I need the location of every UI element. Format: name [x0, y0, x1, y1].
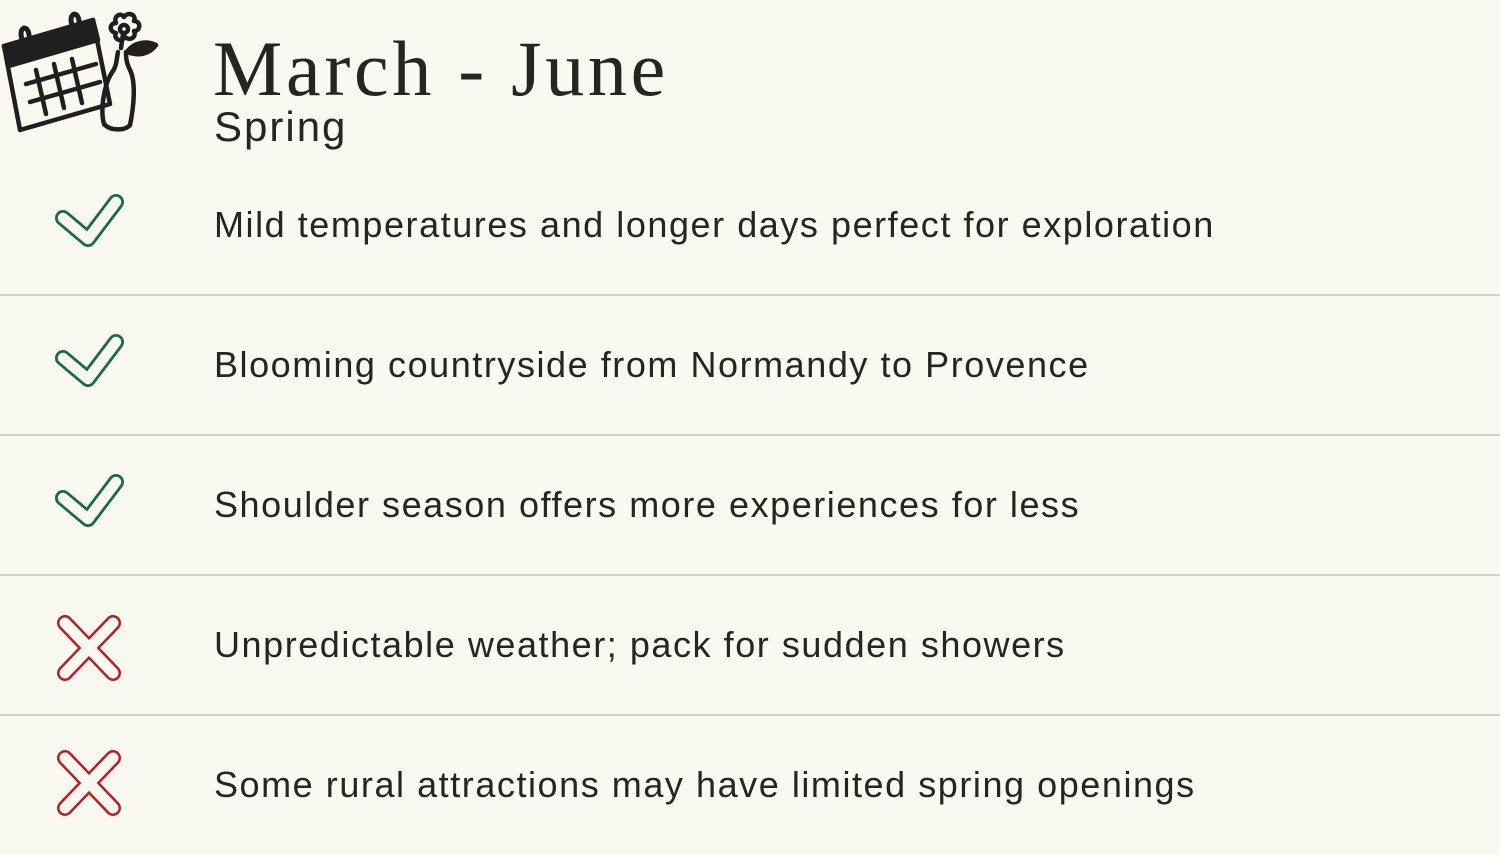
row: pro 1: Mild temperatures and longer days perfect for exploration: [214, 204, 1215, 245]
row: con 1: [57, 615, 1066, 681]
row: pro 3: [55, 474, 1080, 527]
icon: check: [55, 194, 124, 247]
title: March - June: [213, 25, 669, 112]
row: con 2: [57, 750, 1196, 816]
icon: check: [55, 334, 124, 387]
row: con 2: Some rural attractions may have limited spring openings: [214, 764, 1196, 805]
icon: check: [55, 474, 124, 527]
icon: cross: [57, 750, 121, 816]
icon: calendar with flower vase: [2, 12, 158, 132]
row: pro 3: Shoulder season offers more experiences for less: [214, 484, 1080, 525]
row: pro 1: [55, 194, 1215, 247]
row: con 1: Unpredictable weather; pack for sudden showers: [214, 624, 1066, 665]
icon: cross: [57, 615, 121, 681]
subtitle: Spring: [214, 103, 347, 150]
row: pro 2: [55, 334, 1090, 387]
row: pro 2: Blooming countryside from Normandy to Provence: [214, 344, 1090, 385]
